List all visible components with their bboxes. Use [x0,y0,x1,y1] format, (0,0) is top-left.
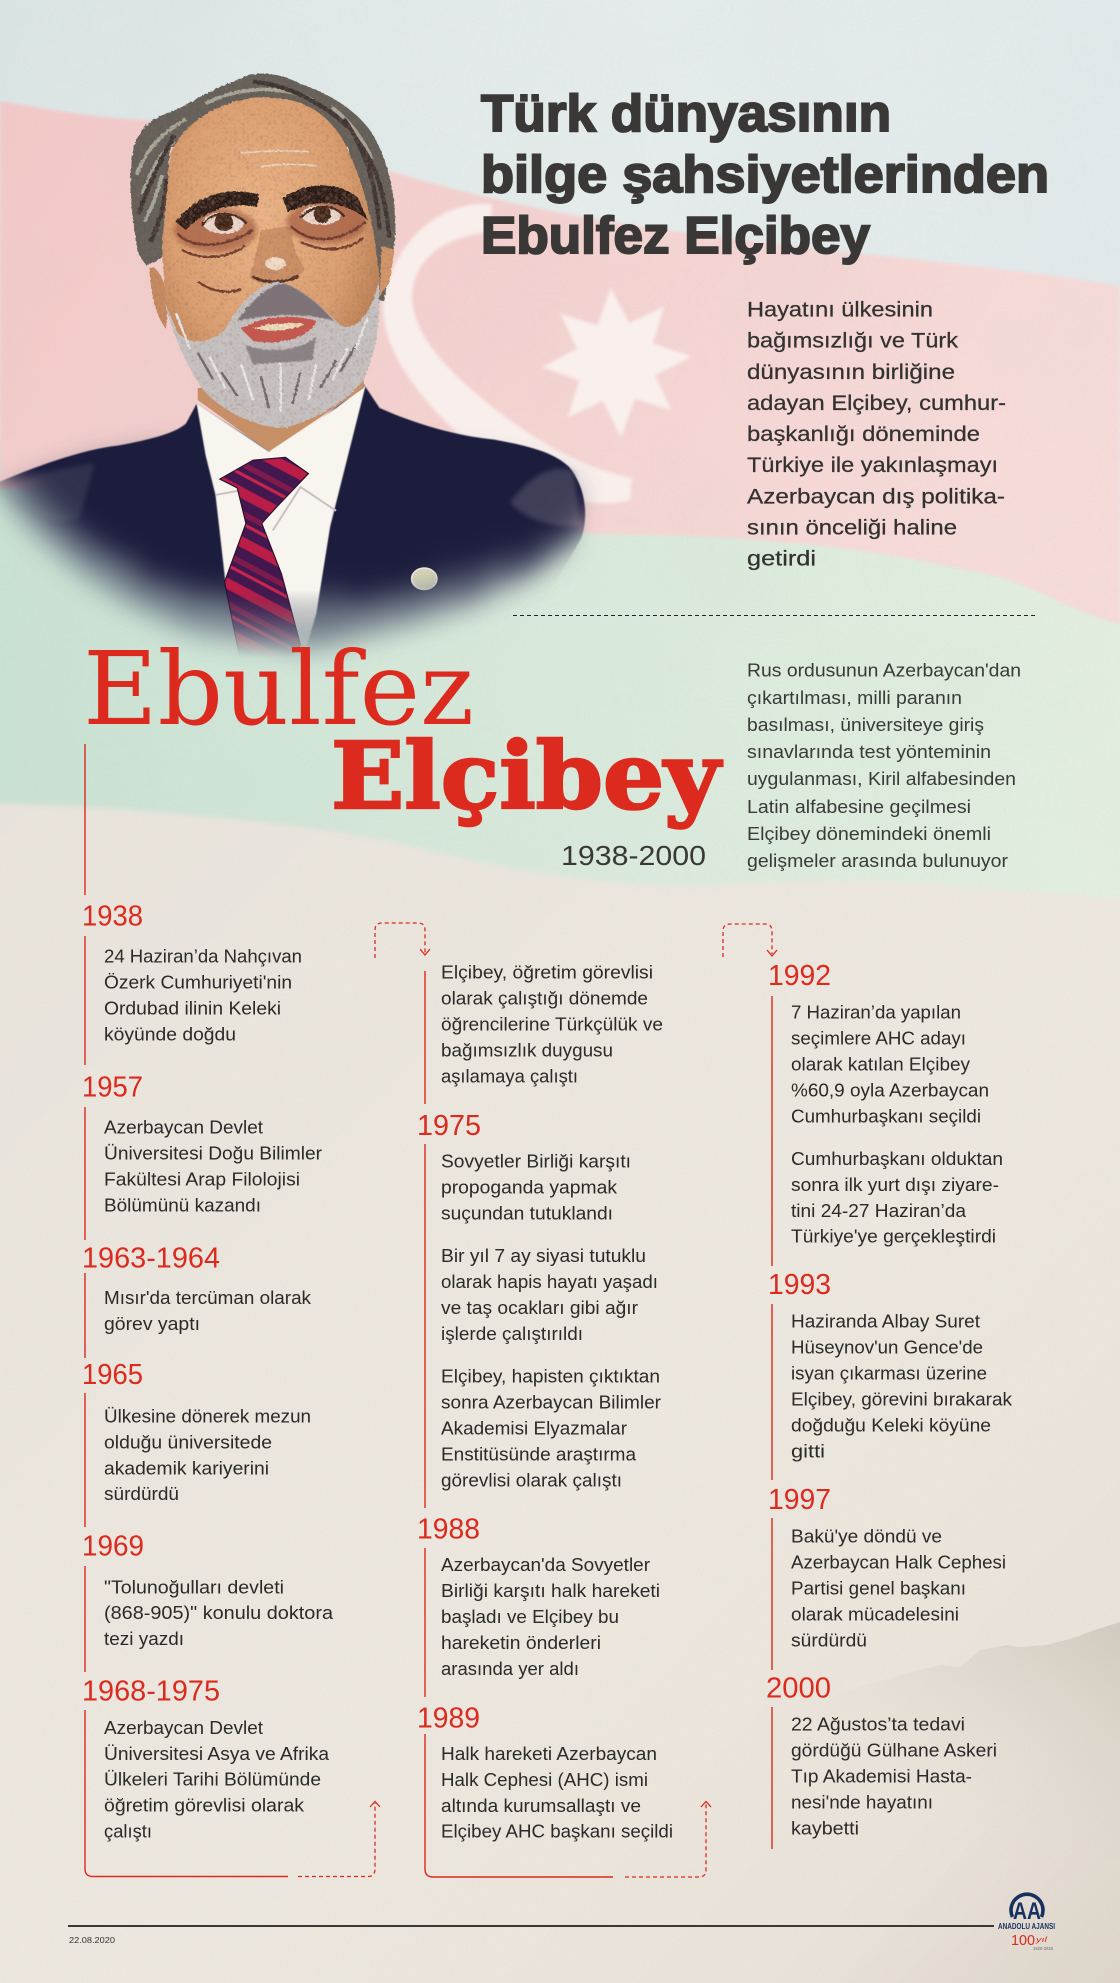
continued 1968-1975 entry: olarak çalıştığı dönemde [441,988,648,1008]
1992 entry: olarak katılan Elçibey [791,1054,970,1074]
face [162,97,380,416]
paragraph: key developments: sınavlarında test yönteminin [747,741,991,762]
arrow: column 1 continues up to column 2 [298,923,430,1876]
1963-1964 entry: Mısır'da tercüman olarak [104,1288,312,1308]
1989 entry: Elçibey AHC başkanı seçildi [441,1822,673,1842]
1938 entry: köyünde doğdu [104,1024,236,1044]
paragraph: key developments: Elçibey dönemindeki önemli [747,823,991,844]
flag crescent [383,204,632,503]
1968-1975 entry [82,1676,330,1876]
arrow: column 2 continues up to column 3 [625,924,777,1877]
1992 entry: Cumhurbaşkanı olduktan [791,1149,1003,1169]
intro paragraph: dünyasının birliğine [747,361,955,384]
1997 entry [768,1484,1006,1670]
1989 entry: Halk hareketi Azerbaycan [441,1744,657,1764]
1938 entry: Özerk Cumhuriyeti'nin [104,972,292,992]
smoke halo below jacket [4,449,577,649]
1975 entry: işlerde çalıştırıldı [441,1324,583,1344]
1989 entry: altında kurumsallaştı ve [441,1796,641,1816]
timeline column 2 [417,962,673,1877]
1989 entry [417,1702,673,1877]
continued 1968-1975 entry: bağımsızlık duygusu [441,1040,613,1060]
1993 entry: Elçibey, görevini bırakarak [791,1389,1013,1409]
1969 entry: (868-905)" konulu doktora [104,1603,334,1623]
1988 entry: başladı ve Elçibey bu [441,1607,619,1627]
1957 entry [82,1072,322,1240]
continued 1968-1975 entry: Elçibey, öğretim görevlisi [441,962,653,982]
timeline column 1 [82,744,334,1876]
2000 entry: Tıp Akademisi Hasta- [791,1767,972,1787]
eyebrows [176,191,259,230]
1965 entry: akademik kariyerini [104,1458,269,1478]
1975 entry: propoganda yapmak [441,1177,618,1197]
1965 entry: Ülkesine dönerek mezun [104,1406,311,1426]
logo: Anadolu Ajansı: 1920-2020 [1033,1946,1053,1951]
1992 entry: %60,9 oyla Azerbaycan [791,1080,989,1100]
1992 entry: Cumhurbaşkanı seçildi [791,1106,981,1126]
2000 entry: kaybetti [791,1818,859,1838]
logo: Anadolu Ajansı: 100 [1011,1932,1035,1949]
1969 entry: "Tolunoğulları devleti [104,1577,284,1597]
1993 entry: 1993 [768,1269,831,1301]
paragraph: key developments: gelişmeler arasında bulunuyor [747,850,1008,871]
1992 entry: 7 Haziran’da yapılan [791,1002,961,1022]
shirt and tie [197,385,366,677]
eye shadows [174,208,257,252]
1957 entry: 1957 [82,1072,143,1104]
paragraph: key developments: Latin alfabesine geçilmesi [747,796,971,817]
1938 entry [82,901,302,1065]
1975 entry: suçundan tutuklandı [441,1203,613,1223]
1957 entry: Azerbaycan Devlet [104,1117,263,1137]
1963-1964 entry: görev yaptı [104,1314,200,1334]
2000 entry: 22 Ağustos’ta tedavi [791,1715,965,1735]
date: 22.08.2020 [69,1935,115,1945]
2000 entry [766,1673,997,1849]
necktie [220,457,308,677]
portrait: Ebulfez Elçibey [0,73,585,677]
1989 entry: Halk Cephesi (AHC) ismi [441,1770,648,1790]
1968-1975 entry: Azerbaycan Devlet [104,1718,263,1738]
1975 entry [417,1110,661,1508]
1997 entry: Azerbaycan Halk Cephesi [791,1552,1006,1572]
1997 entry: sürdürdü [791,1630,867,1650]
1968-1975 entry: 1968-1975 [82,1676,220,1708]
1988 entry: Azerbaycan'da Sovyetler [441,1555,650,1575]
intro paragraph: Azerbaycan dış politika- [747,485,1005,508]
1957 entry: Bölümünü kazandı [104,1195,261,1215]
mouth [241,317,316,342]
hair [130,73,395,301]
1993 entry: doğduğu Keleki köyüne [791,1415,991,1435]
name title: Ebulfez Elçibey: Ebulfez [83,630,474,748]
2000 entry: 2000 [766,1673,831,1705]
beard [164,281,379,428]
timeline column 3 [766,960,1013,1849]
2000 entry: nesi'nde hayatını [791,1793,933,1813]
1992 entry: sonra ilk yurt dışı ziyare- [791,1175,999,1195]
1969 entry: 1969 [82,1531,144,1563]
1975 entry: Bir yıl 7 ay siyasi tutuklu [441,1246,646,1266]
1989 entry: 1989 [417,1702,480,1734]
1968-1975 entry: öğretim görevlisi olarak [104,1796,305,1816]
1975 entry: 1975 [417,1110,481,1142]
1993 entry: gitti [791,1441,825,1461]
intro paragraph [747,298,1006,571]
intro paragraph: Türkiye ile yakınlaşmayı [747,454,998,477]
life dates: 1938-2000 [561,840,706,871]
1988 entry: 1988 [417,1513,480,1545]
logo: Anadolu Ajansı [998,1894,1055,1951]
1993 entry: isyan çıkarması üzerine [791,1363,987,1383]
paragraph: key developments: uygulanması, Kiril alfabesinden [747,768,1016,789]
logo: Anadolu Ajansı: yıl [1034,1937,1048,1944]
logo: Anadolu Ajansı: AA [1013,1898,1041,1925]
1963-1964 entry [82,1242,312,1358]
1993 entry: Haziranda Albay Suret [791,1311,980,1331]
1992 entry [768,960,1003,1266]
neck [198,368,364,451]
1965 entry: olduğu üniversitede [104,1432,272,1452]
paragraph: key developments: Rus ordusunun Azerbaycan'dan [747,660,1021,681]
1968-1975 entry: Ülkeleri Tarihi Bölümünde [104,1770,321,1790]
footer rule [68,1925,994,1927]
1988 entry [417,1513,660,1697]
flag star [537,283,697,443]
1975 entry: görevlisi olarak çalıştı [441,1470,622,1490]
main heading: bilge şahsiyetlerinden [481,146,1049,204]
continued 1968-1975 entry: aşılamaya çalıştı [441,1066,578,1086]
1965 entry: 1965 [82,1359,143,1391]
1975 entry: Enstitüsünde araştırma [441,1444,637,1464]
jacket [0,384,585,661]
2000 entry: gördüğü Gülhane Askeri [791,1741,997,1761]
eyes [202,205,344,234]
intro paragraph: başkanlığı döneminde [747,423,980,446]
1975 entry: Sovyetler Birliği karşıtı [441,1151,631,1171]
1992 entry: tini 24-27 Haziran’da [791,1201,967,1221]
intro paragraph: getirdi [747,548,816,571]
1957 entry: Fakültesi Arap Filolojisi [104,1169,300,1189]
name title: Ebulfez Elçibey [83,630,723,830]
nose [249,226,304,283]
1965 entry: sürdürdü [104,1484,179,1504]
1997 entry: olarak mücadelesini [791,1604,959,1624]
1975 entry: Elçibey, hapisten çıktıktan [441,1367,660,1387]
ear [149,267,168,329]
main heading [481,85,1049,265]
intro paragraph: sının önceliği haline [747,516,957,540]
name title: Ebulfez Elçibey: Elçibey [331,722,723,830]
intro paragraph: bağımsızlığı ve Türk [747,330,959,353]
1938 entry: 1938 [82,901,143,933]
continued 1968-1975 entry: öğrencilerine Türkçülük ve [441,1014,663,1034]
1997 entry: Partisi genel başkanı [791,1578,966,1598]
1975 entry: ve taş ocakları gibi ağır [441,1298,638,1318]
1968-1975 entry: Üniversitesi Asya ve Afrika [104,1744,330,1764]
1988 entry: hareketin önderleri [441,1633,601,1653]
intro paragraph: adayan Elçibey, cumhur- [747,392,1006,415]
1992 entry: 1992 [768,960,831,992]
1988 entry: Birliği karşıtı halk hareketi [441,1581,660,1601]
intro paragraph: Hayatını ülkesinin [747,298,933,322]
1975 entry: sonra Azerbaycan Bilimler [441,1392,661,1412]
1997 entry: Bakü'ye döndü ve [791,1526,942,1546]
head [130,73,395,428]
paragraph: key developments [747,660,1021,871]
main heading: Türk dünyasının [481,85,891,143]
1993 entry: Hüseynov'un Gence'de [791,1337,983,1357]
1997 entry: 1997 [768,1484,831,1516]
1969 entry [82,1531,334,1672]
1963-1964 entry: 1963-1964 [82,1242,220,1274]
1992 entry: seçimlere AHC adayı [791,1028,966,1048]
1968-1975 entry: çalıştı [104,1822,152,1842]
1957 entry: Üniversitesi Doğu Bilimler [104,1143,322,1163]
paragraph: key developments: çıkartılması, milli paranın [747,687,962,708]
1965 entry [82,1359,311,1527]
1975 entry: olarak hapis hayatı yaşadı [441,1272,658,1292]
1992 entry: Türkiye'ye gerçekleştirdi [791,1227,996,1247]
1988 entry: arasında yer aldı [441,1659,579,1679]
1993 entry [768,1269,1013,1480]
1938 entry: Ordubad ilinin Keleki [104,998,281,1018]
continued 1968-1975 entry [425,962,663,1104]
logo: Anadolu Ajansı: ANADOLU AJANSI [998,1921,1055,1931]
shirt [197,385,366,653]
1975 entry: Akademisi Elyazmalar [441,1418,627,1438]
lapel pin [412,568,437,589]
1938 entry: 24 Haziran’da Nahçıvan [104,946,302,966]
paragraph: key developments: basılması, üniversiteye giriş [747,714,984,735]
1969 entry: tezi yazdı [104,1629,184,1649]
main heading: Ebulfez Elçibey [481,207,870,265]
